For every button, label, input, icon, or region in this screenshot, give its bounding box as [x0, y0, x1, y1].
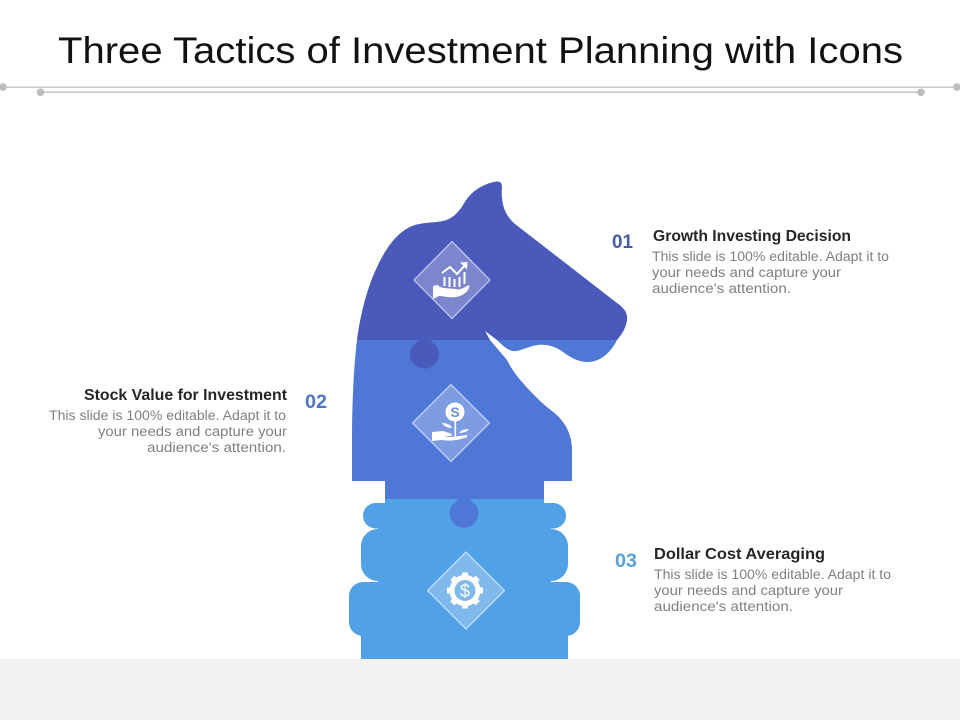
body 01: This slide is 100% editable. Adapt it to: [652, 249, 889, 264]
diamond badge 3: [428, 552, 504, 629]
segment 2: neck of knight: [352, 340, 572, 499]
body 02: [49, 408, 288, 455]
segment 3: base of knight: [349, 495, 580, 659]
body 03: [654, 567, 891, 614]
body 01: [652, 249, 889, 296]
block 01: Growth Investing Decision: [612, 228, 889, 296]
title: Three Tactics of Investment Planning with Icons: [58, 30, 903, 71]
connector drop: segment 2 into segment 3: [450, 495, 478, 528]
heading 01: Growth Investing Decision: [653, 228, 851, 245]
lower jaw band: [497, 340, 617, 362]
number 02: 02: [305, 392, 327, 413]
body 03: This slide is 100% editable. Adapt it to: [654, 567, 891, 582]
icon: hand with growth chart: [414, 242, 490, 318]
diamond badge 2: [412, 384, 490, 462]
body 02: audience's attention.: [147, 440, 286, 455]
body 01: audience's attention.: [652, 281, 791, 296]
footer band: [0, 659, 960, 720]
growth chart glyph: [433, 262, 470, 299]
number 01: 01: [612, 232, 633, 253]
diamond badge 1: [414, 242, 490, 318]
connector drop: segment 1 into segment 2: [410, 336, 439, 369]
icon: hand with dollar plant: [412, 384, 490, 462]
plant glyph: S: [450, 404, 460, 420]
segment 1: head of knight: [357, 181, 627, 340]
body 02: your needs and capture your: [98, 424, 288, 439]
block 02: Stock Value for Investment: [49, 387, 327, 455]
body 02: This slide is 100% editable. Adapt it to: [49, 408, 286, 423]
gear glyph: $: [460, 581, 470, 601]
heading 02: Stock Value for Investment: [84, 387, 288, 404]
heading 03: Dollar Cost Averaging: [654, 546, 825, 563]
number 03: 03: [615, 551, 637, 572]
chess knight graphic: [349, 181, 627, 659]
icon: gear with dollar: [428, 552, 504, 629]
body 01: your needs and capture your: [652, 265, 842, 280]
title rule with end dots: [0, 83, 960, 96]
body 03: your needs and capture your: [654, 583, 844, 598]
block 03: Dollar Cost Averaging: [615, 546, 891, 614]
body 03: audience's attention.: [654, 599, 793, 614]
